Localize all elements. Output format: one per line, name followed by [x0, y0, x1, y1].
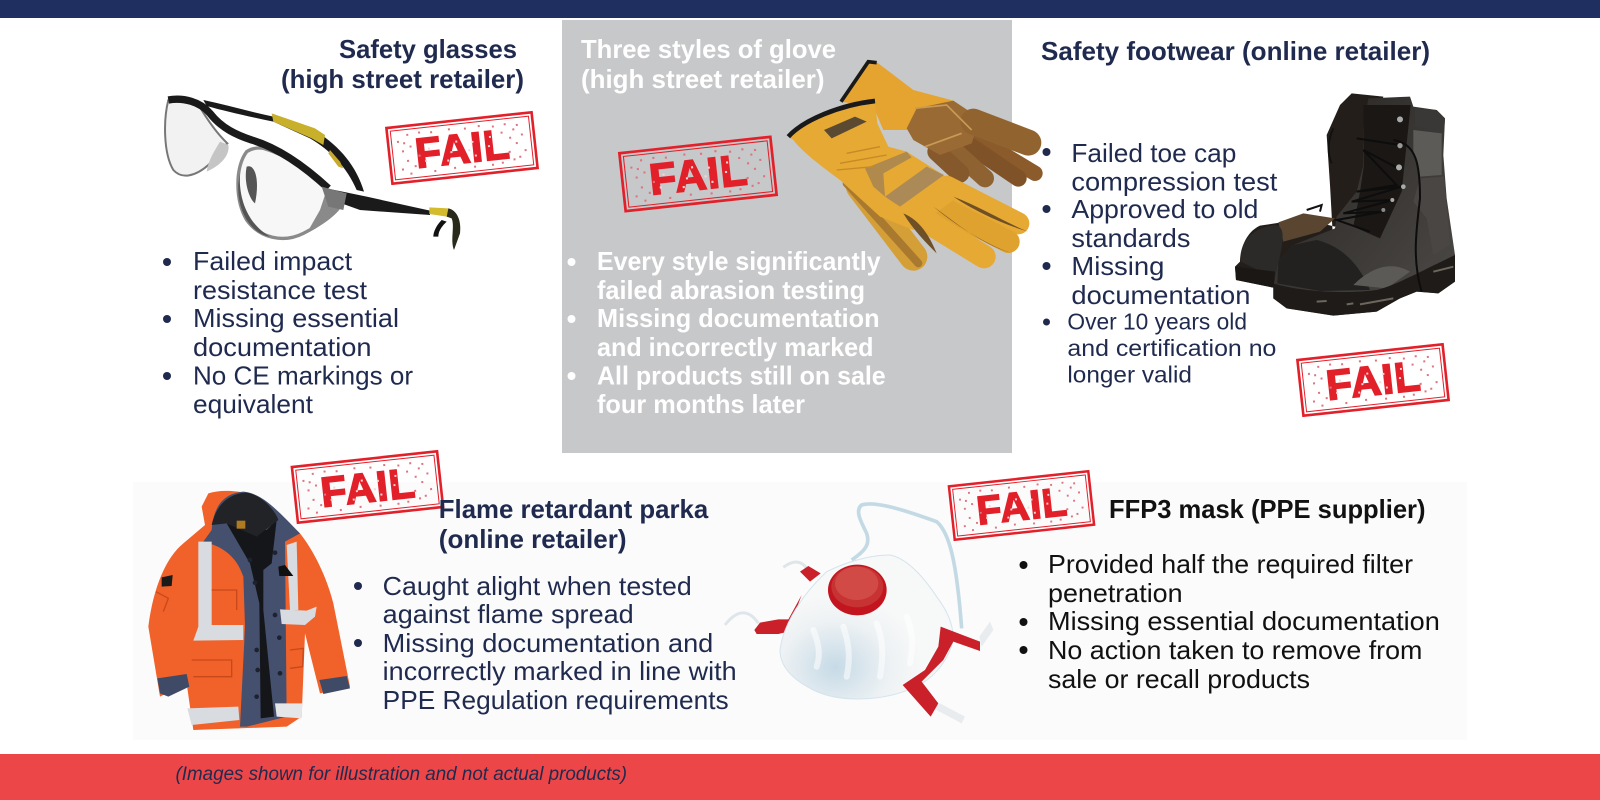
- bullet list: [568, 246, 886, 419]
- heading: Safety footwear (online retailer): [1041, 36, 1430, 66]
- bullet list: Every style significantly: [597, 246, 881, 276]
- stamp: fail: FAIL: [413, 120, 511, 177]
- bullet list: longer valid: [1067, 362, 1192, 388]
- bullet list: against flame spread: [383, 599, 634, 629]
- bullet list: [163, 246, 413, 419]
- bullet list: sale or recall products: [1048, 664, 1310, 694]
- bullet list: Approved to old: [1071, 194, 1258, 224]
- bullet list: resistance test: [193, 275, 368, 305]
- heading: (online retailer): [439, 524, 626, 554]
- heading: (high street retailer): [281, 64, 524, 94]
- icon: safety glasses: [165, 98, 460, 250]
- icon: FFP3 respirator mask: [725, 504, 993, 723]
- bullet list: penetration: [1048, 578, 1183, 608]
- bullet list: incorrectly marked in line with: [383, 656, 737, 686]
- bullet list: Missing: [1071, 251, 1164, 281]
- bullet list: Failed toe cap: [1071, 138, 1236, 168]
- bullet list: and certification no: [1067, 335, 1276, 361]
- bullet list: [1020, 549, 1440, 694]
- heading: Three styles of glove: [581, 34, 836, 64]
- heading: [581, 34, 836, 94]
- bullet list: Missing documentation: [597, 303, 880, 333]
- heading: [439, 494, 709, 554]
- stamp: fail: [386, 112, 538, 184]
- bullet list: No action taken to remove from: [1048, 635, 1422, 665]
- stamp: fail: [619, 137, 777, 211]
- grey glove panel: [562, 20, 1012, 453]
- heading: [281, 34, 524, 94]
- bullet list: compression test: [1071, 167, 1278, 197]
- top bar: [0, 0, 1600, 18]
- bottom pale panel: [133, 482, 1467, 740]
- footer bar: [0, 754, 1600, 800]
- stamp: fail: FAIL: [318, 459, 417, 516]
- bullet list: documentation: [1071, 280, 1250, 310]
- icon: work boots: [1235, 93, 1455, 316]
- bullet list: All products still on sale: [597, 360, 886, 390]
- panel: gloves: [568, 34, 1035, 419]
- icon: hi-vis parka: [148, 491, 350, 730]
- icon: leather gloves: [788, 61, 1035, 263]
- stamp: fail: [292, 451, 443, 523]
- stamp: fail: FAIL: [647, 145, 749, 205]
- panel: parka: [148, 451, 737, 730]
- bullet list: [1042, 138, 1278, 388]
- heading: (high street retailer): [581, 64, 824, 94]
- bullet list: equivalent: [193, 389, 314, 419]
- panel: FFP3 mask: [725, 471, 1440, 723]
- footer note: (Images shown for illustration and not actual products): [176, 764, 627, 785]
- bullet list: PPE Regulation requirements: [383, 685, 729, 715]
- stamp: fail: FAIL: [1324, 352, 1422, 409]
- bullet list: documentation: [193, 332, 372, 362]
- bullet list: No CE markings or: [193, 360, 413, 390]
- panel: safety glasses: [163, 34, 538, 419]
- bullet list: Missing essential documentation: [1048, 606, 1440, 636]
- bullet list: [354, 571, 737, 715]
- bullet list: Over 10 years old: [1067, 308, 1247, 334]
- heading: Flame retardant parka: [439, 494, 709, 524]
- heading: FFP3 mask (PPE supplier): [1109, 494, 1426, 524]
- bullet list: Missing documentation and: [383, 628, 713, 658]
- stamp: fail: [1297, 344, 1449, 416]
- bullet list: Provided half the required filter: [1048, 549, 1413, 579]
- bullet list: four months later: [597, 389, 805, 419]
- panel: safety footwear: [1041, 36, 1455, 416]
- bullet list: and incorrectly marked: [597, 332, 874, 362]
- stamp: fail: FAIL: [974, 478, 1069, 534]
- bullet list: failed abrasion testing: [597, 275, 865, 305]
- bullet list: Caught alight when tested: [383, 571, 692, 601]
- bullet list: Missing essential: [193, 303, 399, 333]
- bullet list: standards: [1071, 223, 1190, 253]
- heading: Safety glasses: [339, 34, 517, 64]
- stamp: fail: [949, 471, 1094, 540]
- bullet list: Failed impact: [193, 246, 353, 276]
